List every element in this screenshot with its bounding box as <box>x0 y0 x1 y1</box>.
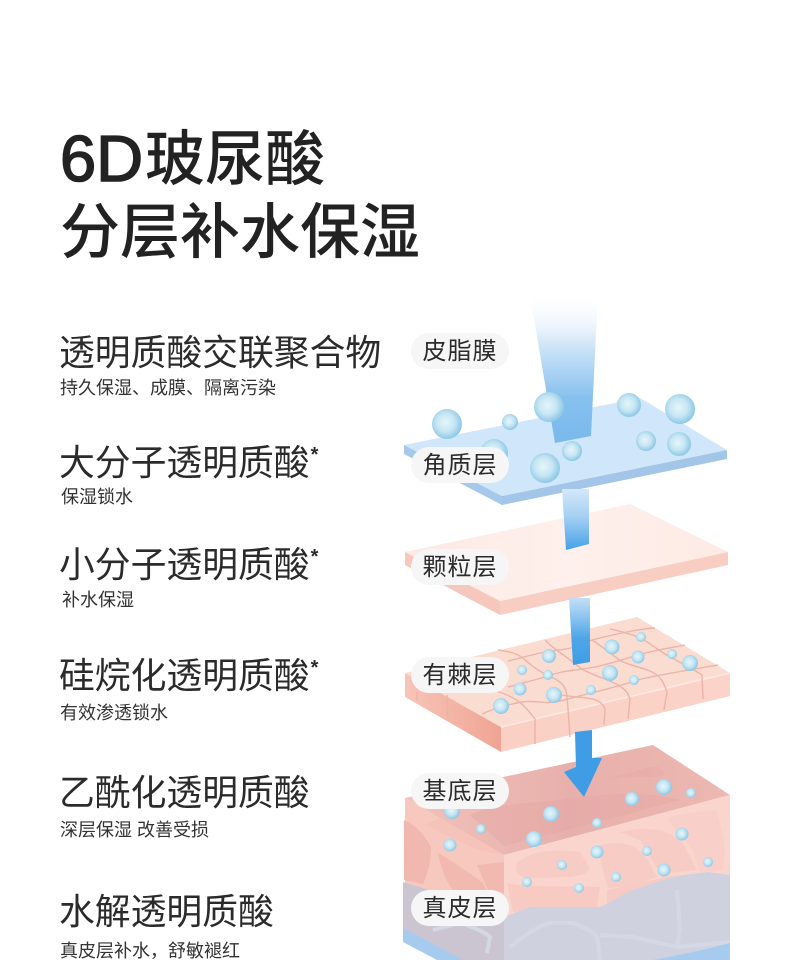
bubbles: base layer <box>444 779 713 893</box>
right face of base layer <box>504 795 730 960</box>
ingredient 1 heading: 透明质酸交联聚合物 <box>59 333 381 373</box>
base layer block <box>404 745 730 960</box>
label: basal layer: 基底层 <box>422 778 498 805</box>
spinous cell block <box>405 617 730 752</box>
title line 1: 玻尿酸 <box>145 126 325 193</box>
label: spinous layer: 有棘层 <box>422 662 498 689</box>
label: sebum film <box>411 333 509 369</box>
beam segment two <box>562 489 589 550</box>
bubbles: stratum corneum <box>432 392 695 483</box>
blue base strip <box>403 928 730 960</box>
ingredient 6 heading: 水解透明质酸 <box>59 892 274 932</box>
ingredient 3 description: 补水保湿 <box>62 590 134 610</box>
ingredient 1 description: 持久保湿、成膜、隔离污染 <box>60 378 276 398</box>
label: granular layer: 颗粒层 <box>422 554 498 581</box>
ingredient 2 heading: 大分子透明质酸* <box>59 443 318 483</box>
ingredient 3 heading: 小分子透明质酸* <box>59 545 318 585</box>
ingredient 4 heading: 硅烷化透明质酸* <box>59 656 318 696</box>
bubbles: spinous layer <box>493 632 698 714</box>
label: basal layer <box>411 773 509 809</box>
label: granular layer <box>411 549 509 585</box>
ingredient 5 heading: 乙酰化透明质酸 <box>59 773 310 813</box>
ingredient 5 description: 深层保湿 改善受损 <box>60 820 209 840</box>
dermis grey overlay <box>403 872 730 960</box>
pink granular plate <box>405 504 728 615</box>
ingredient 2 description: 保湿锁水 <box>61 487 133 507</box>
label: spinous layer <box>411 657 509 693</box>
blue arrow <box>564 730 602 797</box>
beam segment three <box>569 598 590 665</box>
blue stratum corneum plate <box>404 398 727 505</box>
label: stratum corneum <box>411 447 509 483</box>
label: dermis: 真皮层 <box>422 895 498 922</box>
title line 1 <box>60 122 325 195</box>
title line 1: 6D <box>60 122 143 195</box>
water beam top <box>530 293 598 443</box>
label: sebum film: 皮脂膜 <box>422 338 498 365</box>
label: stratum corneum: 角质层 <box>422 452 498 479</box>
label: dermis <box>411 890 509 926</box>
ingredient 4 description: 有效渗透锁水 <box>60 703 168 723</box>
title line 2: 分层补水保湿 <box>60 199 420 266</box>
left face of base layer <box>404 798 504 960</box>
